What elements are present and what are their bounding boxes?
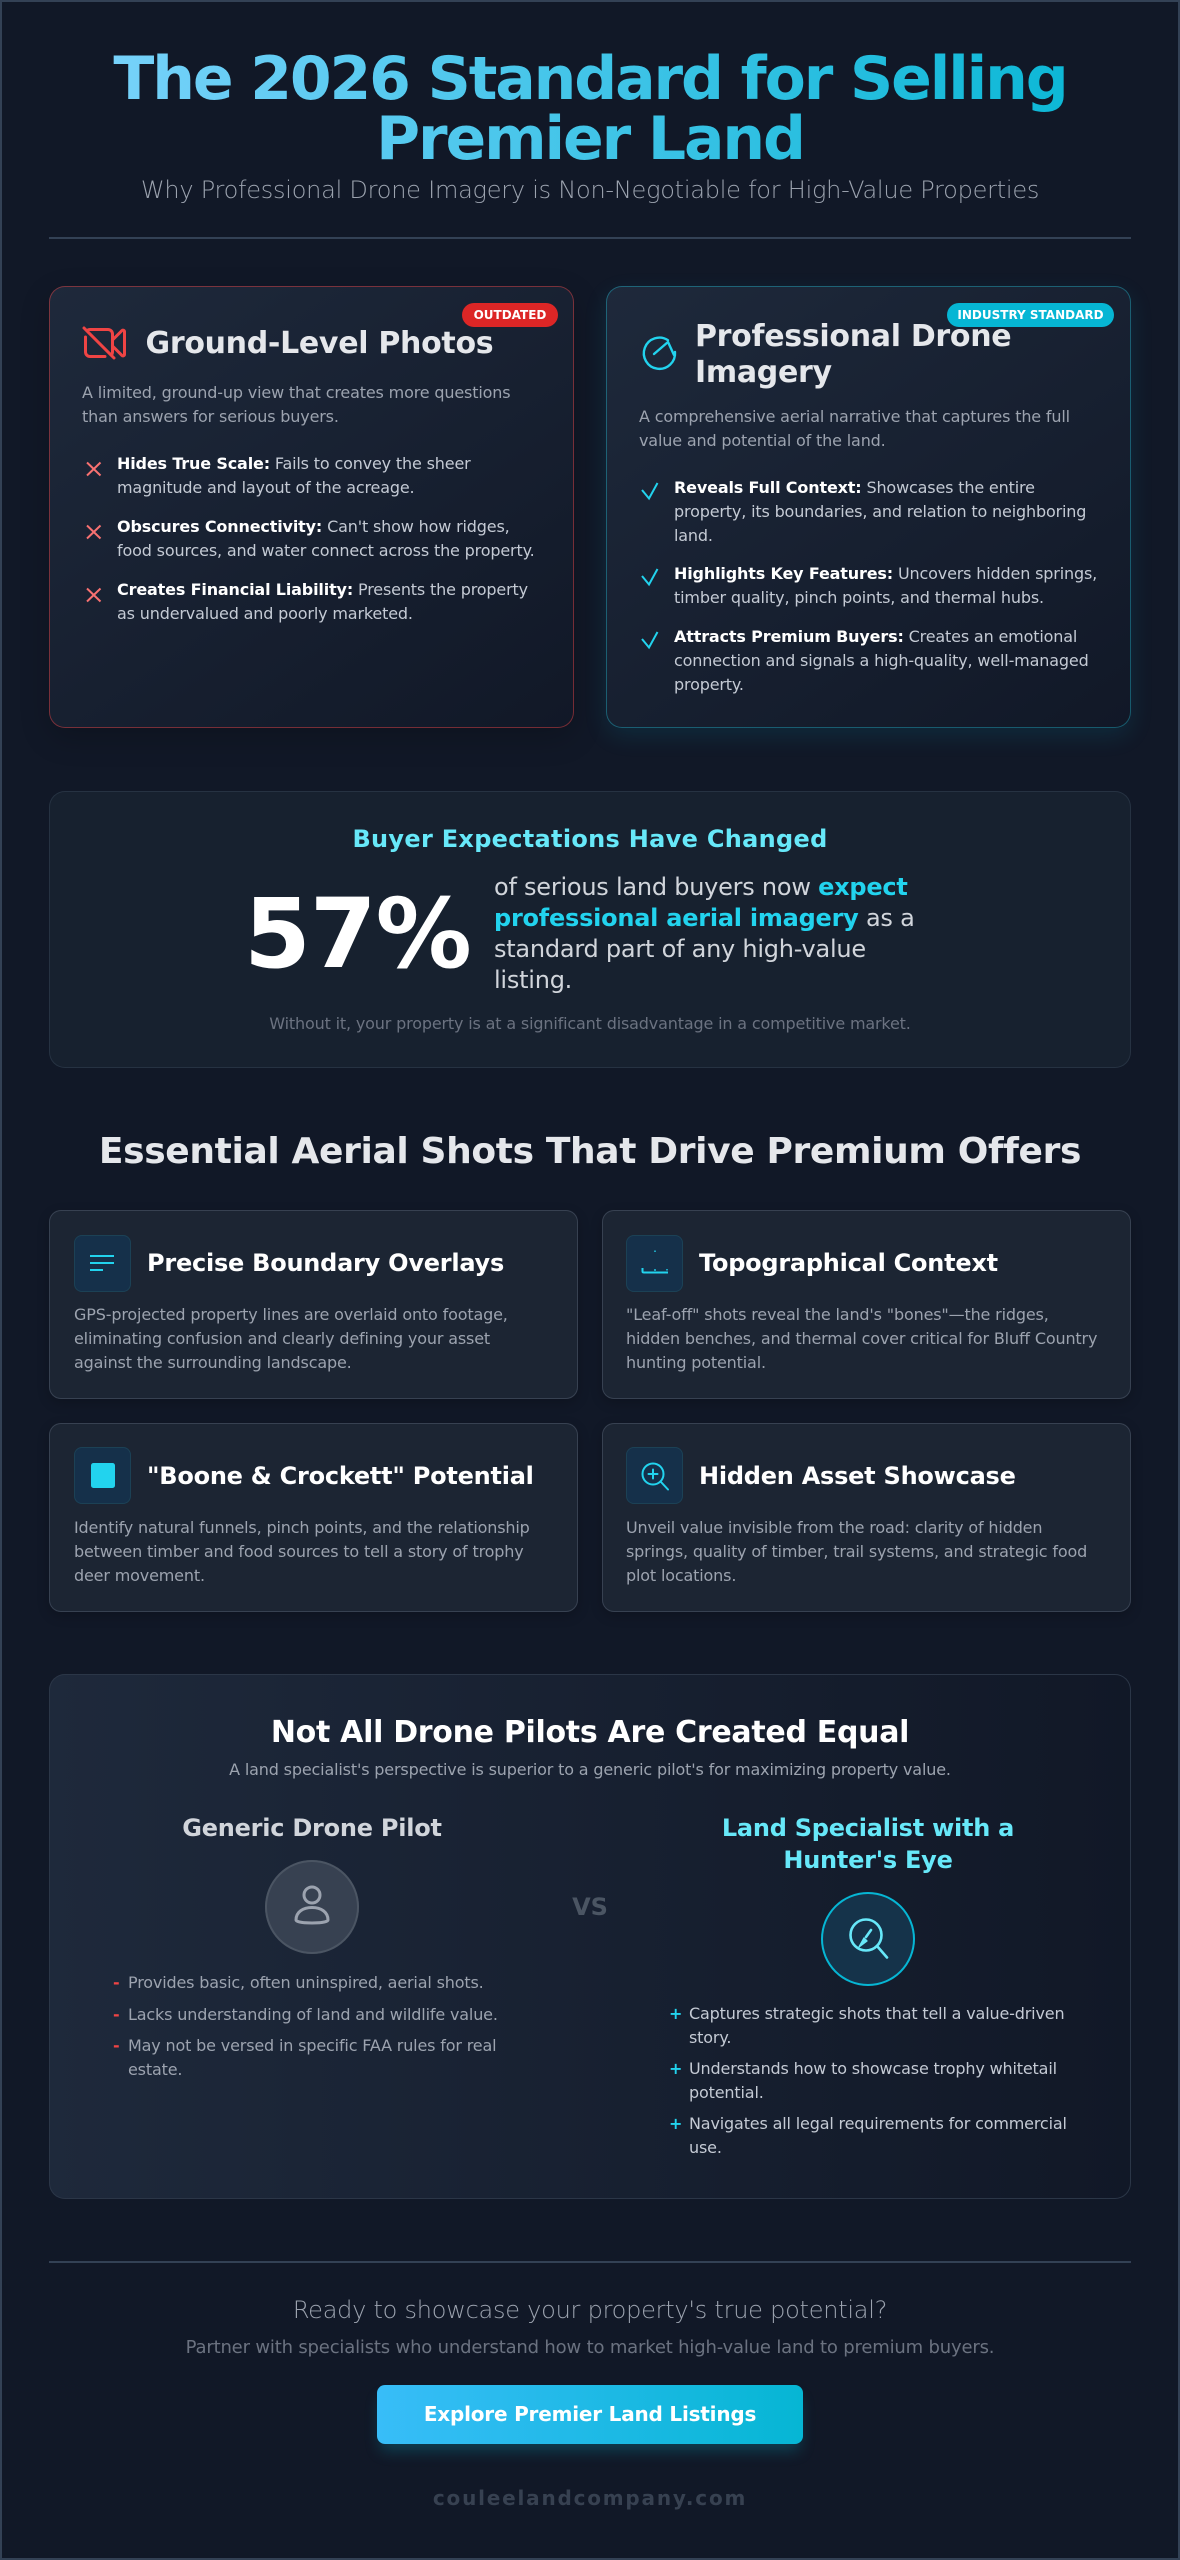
list item: buyers: connection and signals a high-quality, well-managed bbox=[674, 650, 1089, 670]
item: May not be versed in specific FAA rules for real bbox=[128, 2036, 496, 2054]
button bbox=[377, 2385, 803, 2444]
icon: check bbox=[641, 482, 658, 500]
card title: Topographical Context bbox=[699, 1249, 998, 1277]
icon: x bbox=[86, 462, 102, 476]
heading: Not All Drone Pilots Are Created Equal bbox=[271, 1715, 909, 1750]
card text: Identify natural funnels, pinch points, and the relationship bbox=[74, 1518, 530, 1537]
card text bbox=[74, 1518, 530, 1585]
list item: features: timber quality, pinch points, and thermal hubs. bbox=[674, 588, 1044, 606]
icon: lines bbox=[74, 1235, 131, 1292]
icon: check bbox=[641, 632, 658, 650]
icon: check bbox=[641, 568, 658, 586]
note: Without it, your property is at a significant disadvantage in a competitive market. bbox=[269, 1014, 911, 1032]
list item: scale: Hides True Scale: Fails to convey the sheer bbox=[117, 454, 471, 472]
vs label: VS bbox=[572, 1893, 608, 1921]
heading: Professional Drone bbox=[695, 319, 1011, 354]
item: estate. bbox=[128, 2060, 182, 2078]
item: Captures strategic shots that tell a value-driven bbox=[689, 2004, 1064, 2023]
card text bbox=[626, 1518, 1087, 1585]
panel: pilot comparison bbox=[49, 1674, 1131, 2199]
card text bbox=[74, 1305, 508, 1372]
item: potential. bbox=[689, 2083, 764, 2102]
card: boone and crockett bbox=[49, 1423, 578, 1612]
list item: scale: magnitude and layout of the acreage. bbox=[117, 478, 414, 496]
item bbox=[669, 2004, 1064, 2047]
badge: outdated bbox=[462, 303, 558, 327]
card text: eliminating confusion and clearly defining your asset bbox=[74, 1329, 490, 1348]
column heading: generic pilot: Generic Drone Pilot bbox=[182, 1814, 442, 1842]
description: than answers for serious buyers. bbox=[82, 406, 339, 426]
item bbox=[669, 2114, 1067, 2157]
list item: features: Highlights Key Features: Uncovers hidden springs, bbox=[674, 564, 1097, 582]
panel: buyer expectations stat bbox=[49, 791, 1131, 1068]
item: use. bbox=[689, 2138, 722, 2157]
list item: scale bbox=[117, 454, 471, 496]
stat text: standard part of any high-value bbox=[494, 935, 866, 963]
card text: hunting potential. bbox=[626, 1353, 766, 1372]
item: - bbox=[113, 2036, 119, 2054]
item: - bbox=[113, 1972, 119, 1992]
list item: buyers: property. bbox=[674, 674, 744, 694]
card: hidden asset showcase bbox=[602, 1423, 1131, 1612]
heading: Ground-Level Photos bbox=[146, 326, 493, 360]
description bbox=[82, 382, 510, 426]
badge: industry standard: INDUSTRY STANDARD bbox=[957, 308, 1104, 322]
icon: drone lens bbox=[642, 336, 676, 370]
card text: between timber and food sources to tell a story of trophy bbox=[74, 1542, 524, 1561]
item: Provides basic, often uninspired, aerial shots. bbox=[128, 1972, 484, 1992]
description: A limited, ground-up view that creates more questions bbox=[82, 382, 510, 402]
list item: connectivity bbox=[117, 516, 535, 560]
icon: square bbox=[74, 1447, 131, 1504]
icon: hunter lens bbox=[821, 1892, 915, 1986]
column heading: land specialist bbox=[722, 1814, 1014, 1874]
card title: Precise Boundary Overlays bbox=[147, 1249, 504, 1277]
panel: professional drone imagery bbox=[606, 286, 1131, 728]
list item: buyers bbox=[674, 626, 1089, 694]
column heading: land specialist: Land Specialist with a bbox=[722, 1814, 1014, 1842]
list item: features bbox=[674, 564, 1097, 606]
subtitle: Why Professional Drone Imagery is Non-Negotiable for High-Value Properties bbox=[141, 176, 1039, 204]
list item: connectivity: food sources, and water connect across the property. bbox=[117, 540, 535, 560]
item: - bbox=[113, 2004, 119, 2024]
item: story. bbox=[689, 2028, 731, 2047]
list item: context: land. bbox=[674, 526, 713, 544]
button: Explore Premier Land Listings bbox=[424, 2402, 756, 2426]
badge: industry standard bbox=[947, 303, 1114, 327]
item bbox=[113, 2036, 496, 2078]
card: boundary overlays bbox=[49, 1210, 578, 1399]
list: land specialist bbox=[669, 2004, 1067, 2157]
stat text: of serious land buyers now expect bbox=[494, 872, 908, 900]
card title: Hidden Asset Showcase bbox=[699, 1462, 1016, 1490]
card text: springs, quality of timber, trail systems, and strategic food bbox=[626, 1542, 1087, 1561]
list item: buyers: Attracts Premium Buyers: Creates an emotional bbox=[674, 626, 1077, 646]
item: + bbox=[669, 2004, 682, 2023]
list item: context: property, its boundaries, and relation to neighboring bbox=[674, 502, 1086, 520]
item: Navigates all legal requirements for commercial bbox=[689, 2114, 1067, 2133]
badge: outdated: OUTDATED bbox=[474, 308, 546, 322]
card title: "Boone & Crockett" Potential bbox=[147, 1462, 534, 1490]
subheading: A land specialist's perspective is superior to a generic pilot's for maximizing property value. bbox=[229, 1760, 951, 1778]
stat text: listing. bbox=[494, 966, 572, 994]
icon: magnifier plus bbox=[626, 1447, 683, 1504]
icon: x bbox=[86, 588, 102, 602]
card text: GPS-projected property lines are overlaid onto footage, bbox=[74, 1305, 508, 1324]
title: The 2026 Standard for Selling bbox=[113, 44, 1067, 114]
card text: against the surrounding landscape. bbox=[74, 1353, 352, 1372]
icon: video off bbox=[82, 326, 126, 360]
heading bbox=[695, 319, 1011, 390]
list item: liability: as undervalued and poorly marketed. bbox=[117, 604, 413, 622]
stat text: professional aerial imagery as a bbox=[494, 904, 915, 932]
title: Premier Land bbox=[376, 104, 804, 174]
list item: liability: Creates Financial Liability: Presents the property bbox=[117, 580, 528, 598]
panel: ground-level photos bbox=[49, 286, 574, 728]
section heading: Essential Aerial Shots That Drive Premium Offers bbox=[99, 1131, 1081, 1172]
item: + bbox=[669, 2114, 682, 2133]
card text: deer movement. bbox=[74, 1566, 205, 1585]
heading: Imagery bbox=[695, 355, 832, 390]
card text: Unveil value invisible from the road: clarity of hidden bbox=[626, 1518, 1042, 1537]
column heading: land specialist: Hunter's Eye bbox=[783, 1846, 953, 1874]
big number: 57% bbox=[244, 878, 471, 990]
description: value and potential of the land. bbox=[639, 430, 886, 450]
list item: connectivity: Obscures Connectivity: Can't show how ridges, bbox=[117, 516, 510, 536]
card text: "Leaf-off" shots reveal the land's "bones"—the ridges, bbox=[626, 1305, 1049, 1324]
description: A comprehensive aerial narrative that captures the full bbox=[639, 406, 1070, 426]
item bbox=[669, 2059, 1057, 2102]
card: topographical context bbox=[602, 1210, 1131, 1399]
heading: Buyer Expectations Have Changed bbox=[352, 825, 828, 853]
icon: x bbox=[86, 524, 102, 540]
card text: plot locations. bbox=[626, 1566, 736, 1585]
list: generic pilot bbox=[113, 1972, 498, 2078]
card text bbox=[626, 1305, 1097, 1372]
item: Lacks understanding of land and wildlife value. bbox=[128, 2004, 498, 2024]
list item: context: Reveals Full Context: Showcases the entire bbox=[674, 478, 1035, 496]
list item: liability bbox=[117, 580, 528, 622]
list item: context bbox=[674, 478, 1086, 544]
domain: couleelandcompany.com bbox=[433, 2486, 747, 2510]
item: + bbox=[669, 2059, 682, 2078]
item: Understands how to showcase trophy whitetail bbox=[689, 2059, 1057, 2078]
icon: person bbox=[265, 1860, 359, 1954]
footer headline: Ready to showcase your property's true potential? bbox=[293, 2296, 887, 2324]
card text: hidden benches, and thermal cover critical for Bluff Country bbox=[626, 1329, 1097, 1348]
description bbox=[639, 406, 1070, 450]
stat text bbox=[494, 872, 915, 994]
title bbox=[49, 48, 1131, 168]
icon: terrain bbox=[626, 1235, 683, 1292]
footer text: Partner with specialists who understand how to market high-value land to premium buyers. bbox=[186, 2337, 994, 2358]
